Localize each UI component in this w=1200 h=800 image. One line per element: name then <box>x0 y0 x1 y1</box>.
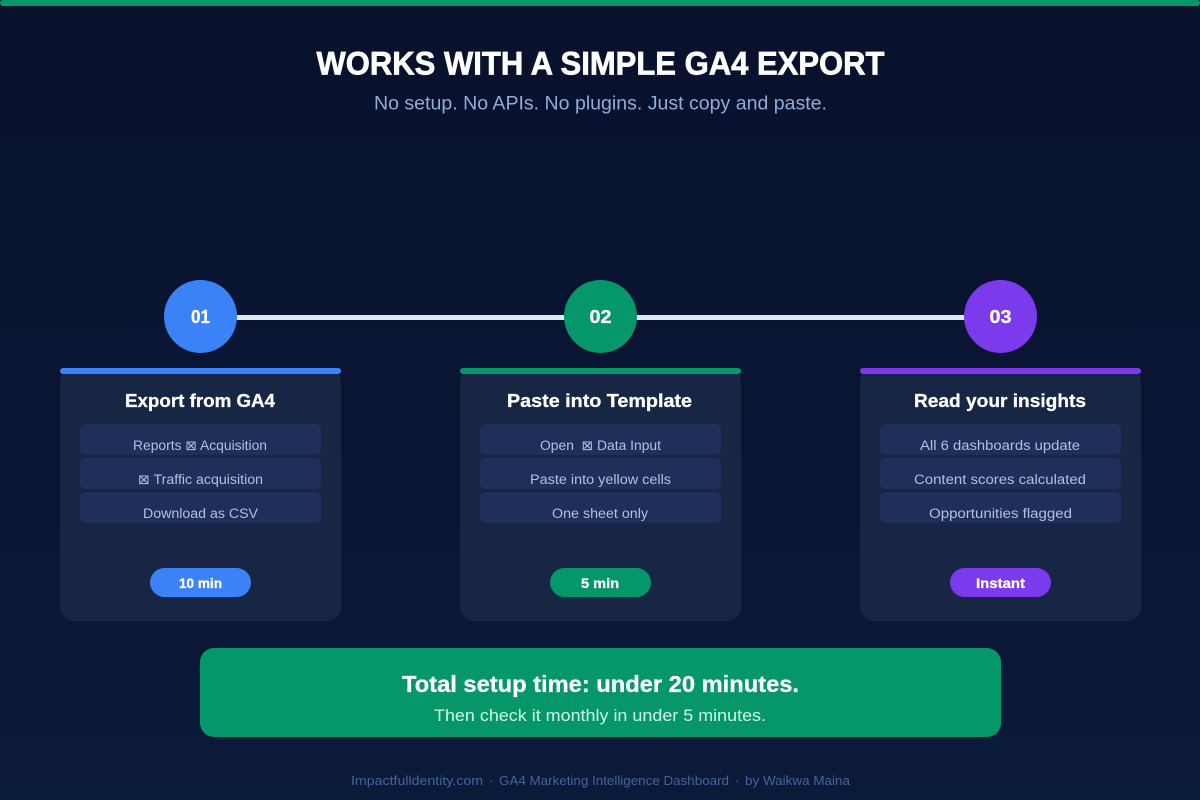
step marker 03 <box>964 280 1037 353</box>
footer <box>351 773 851 788</box>
footer: by Waikwa Maina <box>745 773 851 788</box>
list item 3 <box>480 492 721 523</box>
time badge: 10 min <box>179 576 222 591</box>
timeline connector <box>200 315 1000 320</box>
step marker 02: 02 <box>590 306 612 327</box>
callout heading: Total setup time: under 20 minutes. <box>402 671 799 697</box>
list item 2: ⊠ Traffic acquisition <box>138 472 263 487</box>
top accent bar <box>0 0 1200 6</box>
panel heading: Export from GA4 <box>125 390 276 411</box>
list item 2 <box>880 458 1121 489</box>
footer: · <box>489 773 493 788</box>
list item 3 <box>80 492 321 523</box>
list item 2 <box>80 458 321 489</box>
list item 3: Download as CSV <box>143 506 258 521</box>
list item 2 <box>480 458 721 489</box>
step marker 01: 01 <box>191 306 210 327</box>
title: WORKS WITH A SIMPLE GA4 EXPORT <box>316 46 885 82</box>
subtitle: No setup. No APIs. No plugins. Just copy and paste. <box>374 92 827 114</box>
step marker 03: 03 <box>990 306 1012 327</box>
panel heading: Paste into Template <box>507 390 692 411</box>
list item 2: Paste into yellow cells <box>530 472 671 487</box>
list item 1 <box>880 424 1121 455</box>
list item 3: Opportunities flagged <box>929 506 1072 521</box>
time badge <box>950 568 1051 597</box>
step marker 02 <box>564 280 637 353</box>
callout: total setup time <box>200 648 1001 737</box>
list item 1: Reports ⊠ Acquisition <box>133 438 267 453</box>
time badge: Instant <box>976 576 1026 591</box>
step marker 01 <box>164 280 237 353</box>
time badge: 5 min <box>581 576 619 591</box>
list item 1: All 6 dashboards update <box>920 438 1080 453</box>
list item 1 <box>480 424 721 455</box>
list item 3: One sheet only <box>552 506 648 521</box>
callout text: Then check it monthly in under 5 minutes. <box>434 707 766 725</box>
footer: GA4 Marketing Intelligence Dashboard <box>499 773 729 788</box>
time badge <box>550 568 651 597</box>
panel heading: Read your insights <box>914 390 1086 411</box>
list item 2: Content scores calculated <box>914 472 1086 487</box>
panel: paste into template <box>460 368 741 621</box>
time badge <box>150 568 251 597</box>
list item 1 <box>80 424 321 455</box>
list item 3 <box>880 492 1121 523</box>
panel: export from GA4 <box>60 368 341 621</box>
panel: read your insights <box>860 368 1141 621</box>
list item 1: Open ⊠ Data Input <box>540 438 661 453</box>
footer: · <box>735 773 739 788</box>
footer: Impactfulldentity.com <box>351 773 483 788</box>
